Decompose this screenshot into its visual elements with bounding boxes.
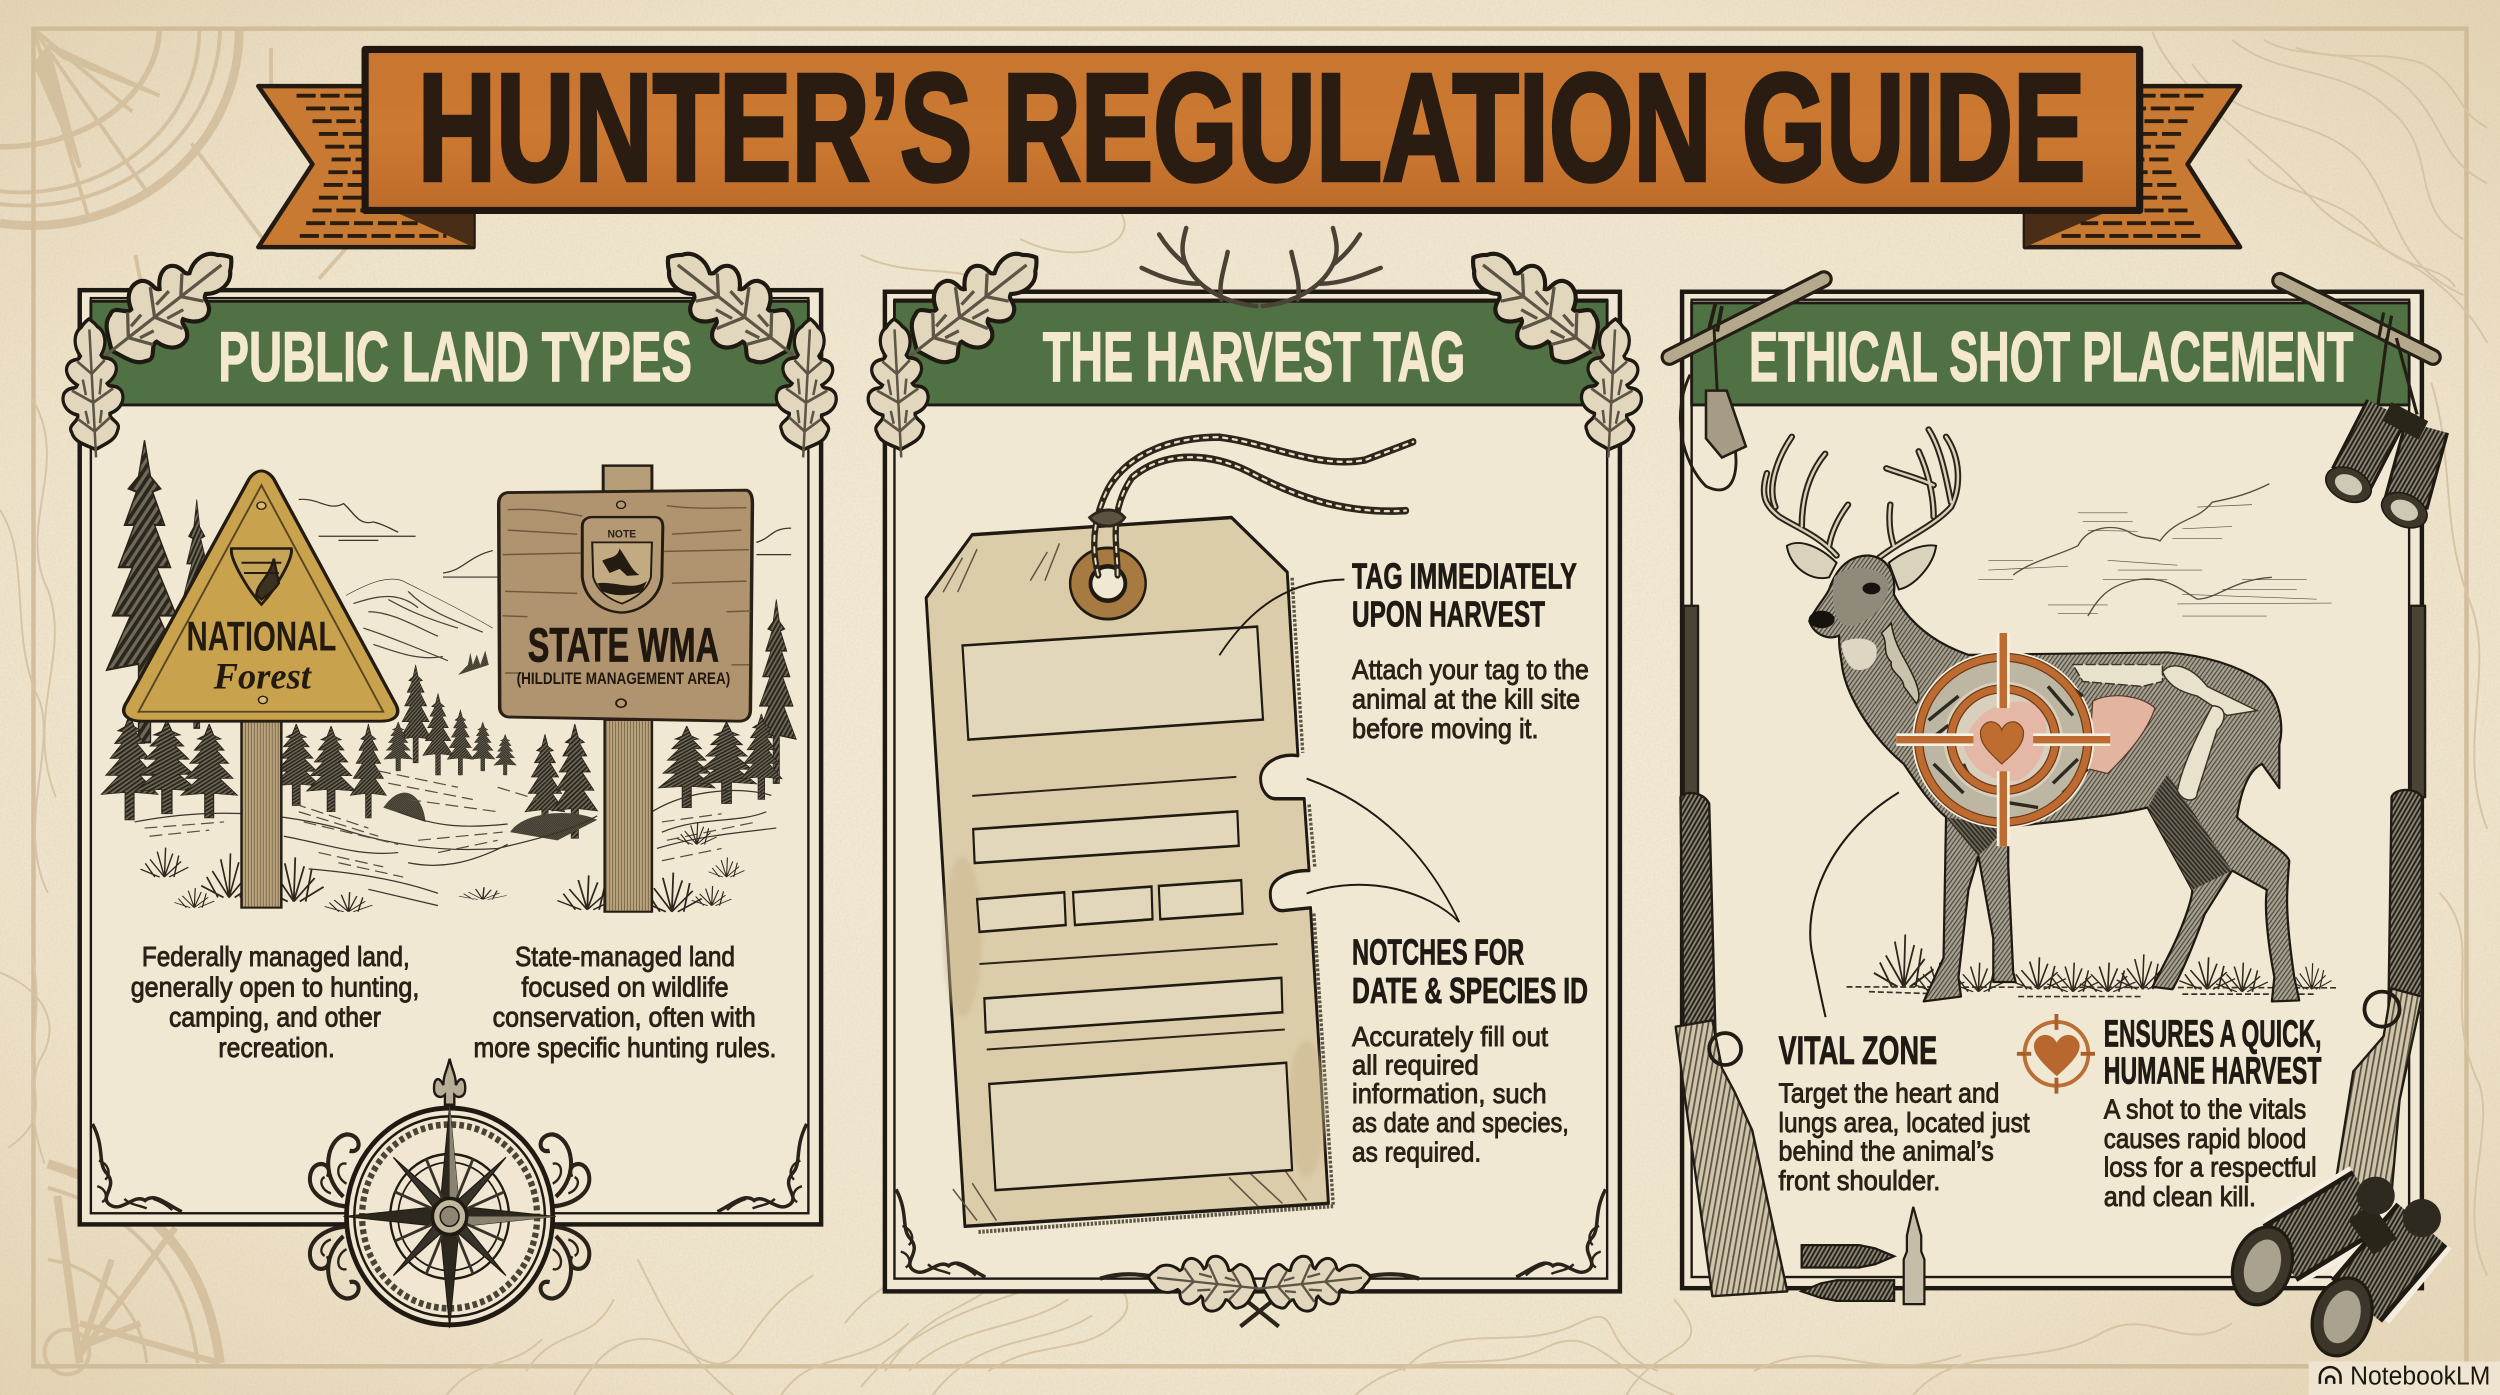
notches callout: information, such [1352, 1078, 1547, 1109]
bullets [1802, 1207, 1924, 1304]
state wma lower post [605, 720, 652, 912]
humane harvest text: HUMANE HARVEST [2104, 1049, 2321, 1092]
compass watermark top left [0, 29, 383, 383]
oak leaves left [59, 227, 255, 459]
notches callout: all required [1352, 1050, 1479, 1081]
header bar: PUBLIC LAND TYPES [218, 317, 692, 396]
notches callout [1352, 933, 1588, 1167]
vital zone text: VITAL ZONE [1779, 1029, 1937, 1073]
top right binoculars [2320, 410, 2433, 535]
national forest description: Federally managed land, [142, 941, 410, 972]
notebooklm watermark [2309, 1362, 2500, 1395]
humane harvest text: causes rapid blood [2104, 1123, 2306, 1154]
deer shading [1946, 774, 2232, 890]
state wma sign text: STATE WMA [528, 620, 719, 673]
left rifle [1676, 606, 1787, 1296]
state wma sign text: (HILDLITE MANAGEMENT AREA) [517, 669, 730, 688]
header bar: THE HARVEST TAG [1043, 317, 1465, 396]
state wma description [474, 941, 776, 1063]
national forest description: camping, and other [169, 1002, 381, 1033]
antlers [1764, 430, 1958, 558]
header bar [894, 301, 1607, 405]
tag immediately callout: UPON HARVEST [1352, 595, 1545, 635]
national forest sign text: Forest [213, 656, 313, 697]
humane harvest text: ENSURES A QUICK, [2104, 1013, 2321, 1056]
harvest tag illustration [926, 437, 1459, 1232]
callout line: tag upon harvest [1219, 579, 1344, 655]
header bar [1692, 303, 2409, 405]
deer ears [1787, 543, 1837, 578]
spine and bones [2073, 665, 2257, 800]
national forest sign text: NATIONAL [187, 612, 336, 659]
tag immediately callout: animal at the kill site [1352, 684, 1580, 715]
state wma wooden sign [499, 490, 752, 721]
right rifle [2331, 606, 2425, 1212]
state wma description: focused on wildlife [521, 971, 729, 1002]
bottom right binoculars [2223, 1177, 2441, 1364]
oak leaves right [1450, 227, 1645, 459]
notches callout: DATE & SPECIES ID [1352, 971, 1588, 1011]
form fields [962, 627, 1292, 1190]
top right stick [2280, 281, 2433, 422]
notebooklm watermark: NotebookLM [2350, 1363, 2490, 1391]
compass watermark bottom left [45, 1164, 220, 1374]
oak leaves left [864, 227, 1060, 459]
main ribbon [365, 49, 2140, 210]
national forest sign post [242, 720, 281, 908]
wma shield emblem [582, 517, 663, 613]
tag body [926, 518, 1328, 1226]
top left stick and pouch [1669, 279, 1824, 490]
tag immediately callout: before moving it. [1352, 713, 1539, 744]
humane harvest text: and clean kill. [2104, 1181, 2256, 1212]
deer body [1809, 556, 2299, 1001]
antler ornament [1142, 228, 1381, 306]
panel: public land types [59, 227, 840, 1328]
national forest description [131, 941, 419, 1063]
grass [1847, 935, 2337, 997]
title banner [258, 42, 2240, 247]
vital zone text: lungs area, located just [1779, 1107, 2030, 1138]
state wma sign text: NOTE [607, 528, 636, 540]
callout line: notches [1307, 779, 1459, 922]
notches callout: as required. [1352, 1136, 1481, 1167]
panel frame [1682, 292, 2422, 1288]
clouds [1978, 484, 2332, 616]
reticle target [1896, 633, 2110, 846]
vital zone text: front shoulder. [1779, 1165, 1940, 1196]
state wma sign text [517, 528, 730, 688]
tag immediately callout [1352, 556, 1589, 744]
tag immediately callout: TAG IMMEDIATELY [1352, 556, 1577, 596]
notches callout: as date and species, [1352, 1107, 1569, 1138]
header bar [91, 301, 808, 405]
national forest description: generally open to hunting, [131, 971, 419, 1002]
left ribbon tail [258, 86, 474, 247]
vital zone leader line [1810, 792, 1899, 1017]
bottom oak ornament [1100, 1250, 1419, 1326]
compass rose ornament [310, 1059, 589, 1328]
deer head detail [1833, 568, 1889, 626]
vital zone text: Target the heart and [1779, 1077, 1999, 1108]
grommet [1070, 548, 1146, 619]
state wma description: more specific hunting rules. [474, 1032, 776, 1063]
oak leaves right [645, 227, 840, 459]
panel: ethical shot placement [1669, 279, 2441, 1364]
panel: the harvest tag [864, 227, 1645, 1326]
right ribbon tail [2025, 86, 2240, 247]
notches callout: Accurately fill out [1352, 1021, 1548, 1052]
state wma description: conservation, often with [493, 1002, 756, 1033]
humane harvest text: A shot to the vitals [2104, 1093, 2306, 1124]
icon: heart in reticle [2017, 1014, 2095, 1094]
landscape scene [101, 440, 796, 912]
state wma top post [603, 466, 652, 494]
deer illustration [1764, 430, 2337, 1001]
vital zone text: behind the animal’s [1779, 1136, 1994, 1167]
national forest description: recreation. [218, 1032, 335, 1063]
panel frame [80, 290, 821, 1224]
humane harvest text [2104, 1013, 2321, 1212]
national forest triangular sign [124, 471, 398, 721]
humane harvest text: loss for a respectful [2104, 1152, 2317, 1183]
tag immediately callout: Attach your tag to the [1352, 654, 1589, 685]
vital zone text [1779, 1029, 2030, 1196]
forest emblem [231, 548, 291, 604]
twine [1089, 437, 1413, 575]
panel frame [885, 292, 1620, 1291]
notches callout: NOTCHES FOR [1352, 933, 1524, 973]
state wma description: State-managed land [515, 941, 735, 972]
lungs [2088, 696, 2155, 774]
national forest sign text [187, 612, 336, 697]
